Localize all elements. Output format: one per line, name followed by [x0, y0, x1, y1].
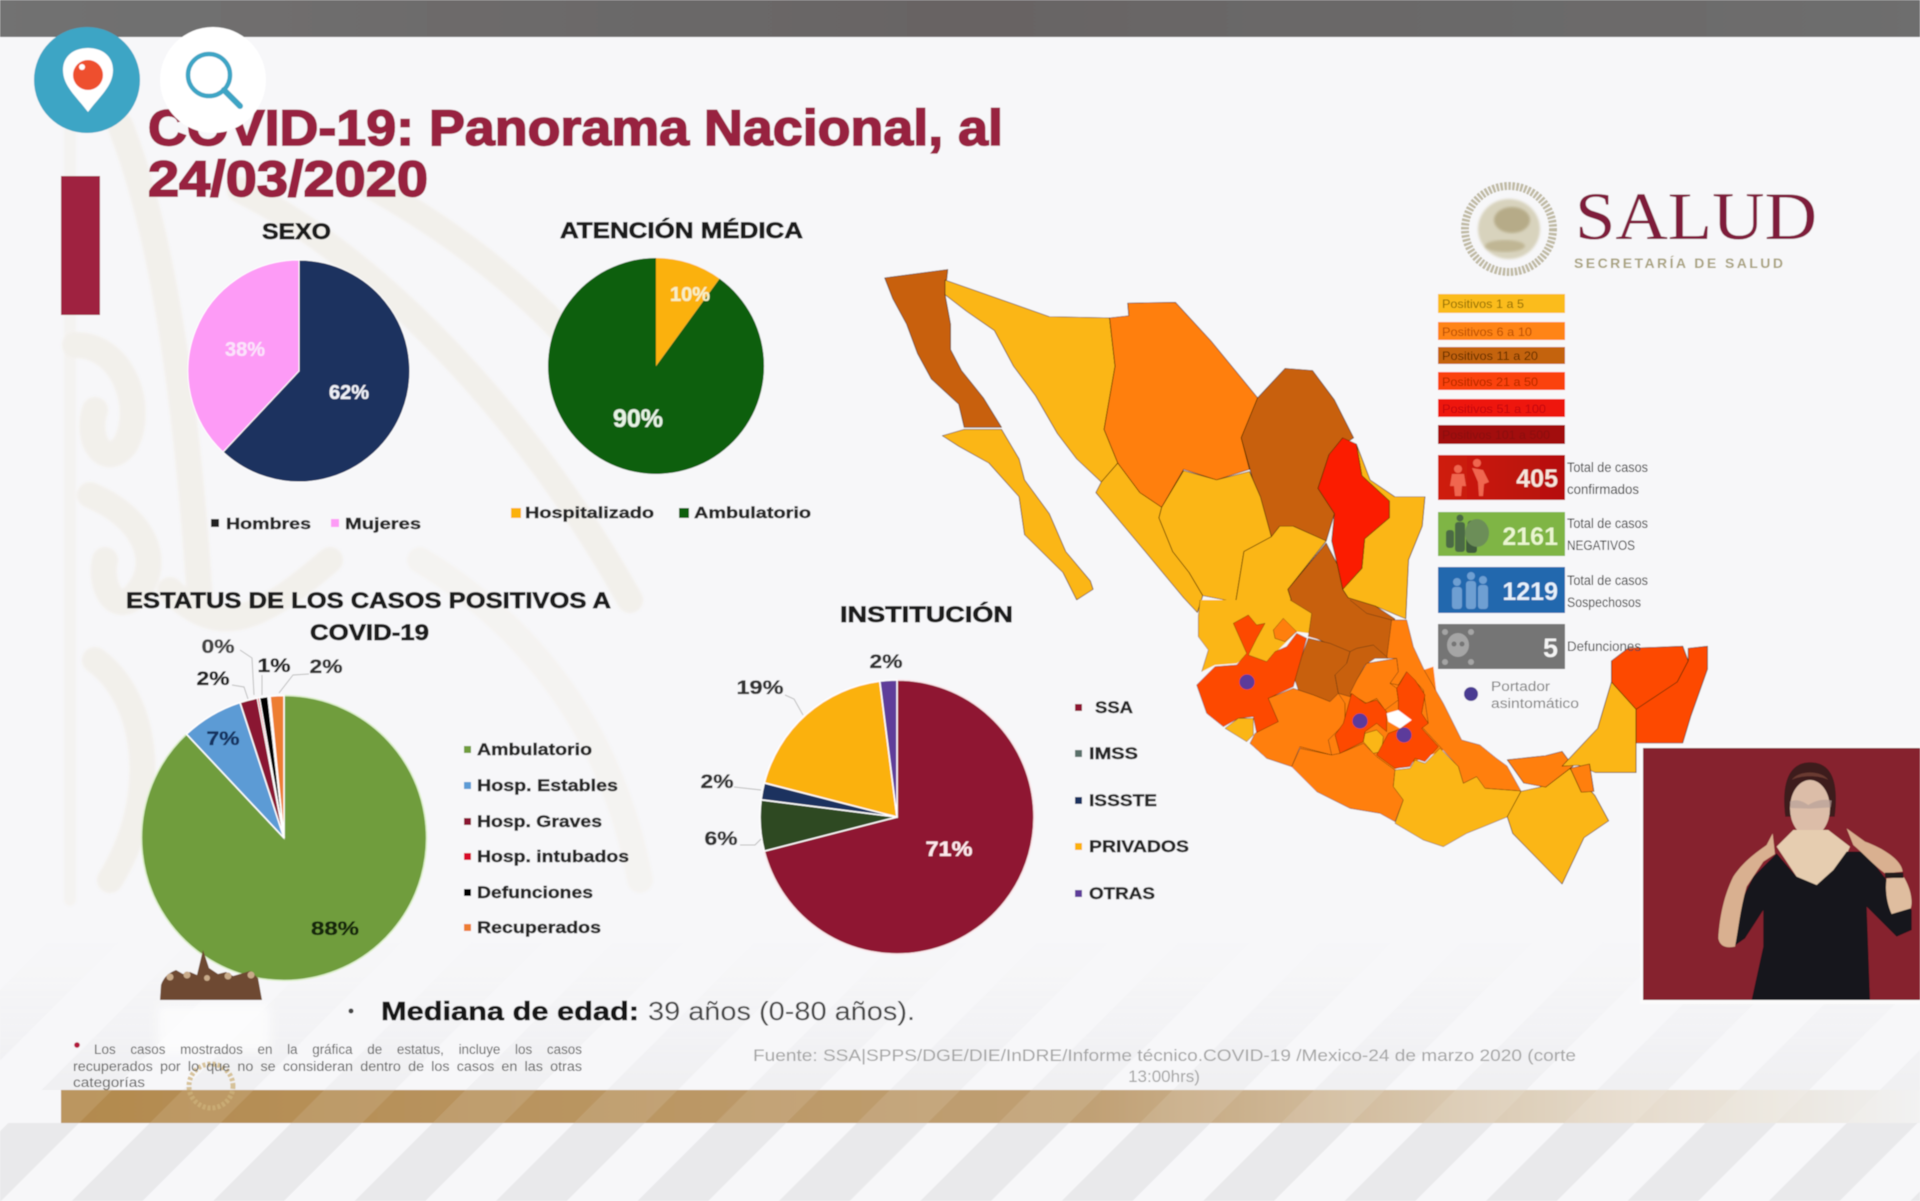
gold footer bar: [61, 1090, 1920, 1123]
map legend: positive ranges: Positivos 101 a 500: [1442, 428, 1550, 442]
chart: sexo: SEXO: [262, 219, 331, 244]
chart: institucion: 19%: [736, 678, 784, 699]
chart: estatus de los casos: Hosp. intubados: [477, 847, 629, 866]
chart: institucion: SSA: [1095, 698, 1133, 717]
chart: institucion: 71%: [926, 838, 973, 861]
chart: atencion medica: 10%: [670, 284, 710, 306]
logo: salud: SALUD: [1575, 178, 1817, 254]
chart: institucion: OTRAS: [1089, 884, 1155, 903]
emblem: figures of history: [158, 950, 270, 1052]
icon: search: [160, 27, 266, 133]
top grey browser band: [0, 0, 1920, 37]
median age: Mediana de edad:: [381, 996, 639, 1026]
median age: [348, 996, 915, 1026]
chart: sexo: 38%: [225, 339, 265, 361]
red accent bar: [61, 176, 100, 315]
stat: negative cases: [1438, 512, 1648, 556]
chart: sexo: Hombres: [226, 516, 311, 533]
sign language interpreter inset: [1640, 745, 1920, 1004]
chart: sexo: [188, 219, 421, 533]
stat: suspected cases: Total de casos: [1567, 573, 1648, 588]
legend: asymptomatic carrier: Portador: [1491, 679, 1551, 694]
stat: suspected cases: 1219: [1502, 578, 1558, 606]
chart: estatus de los casos: COVID-19: [310, 620, 429, 645]
chart: estatus de los casos: 1%: [258, 656, 291, 677]
chart: atencion medica: Hospitalizado: [525, 505, 654, 522]
chart: estatus de los casos: Hosp. Graves: [477, 812, 602, 831]
chart: atencion medica: 90%: [613, 405, 663, 433]
chart: atencion medica: ATENCIÓN MÉDICA: [560, 218, 803, 243]
chart: institucion: PRIVADOS: [1089, 837, 1189, 856]
stat: negative cases: 2161: [1502, 523, 1558, 551]
chart: estatus de los casos: Hosp. Estables: [477, 776, 618, 795]
chart: institucion: 2%: [870, 652, 903, 673]
chart: atencion medica: [511, 218, 811, 522]
map legend: positive ranges: Positivos 6 a 10: [1442, 325, 1532, 339]
chart: estatus de los casos: [126, 588, 629, 981]
stat: negative cases: Total de casos: [1567, 516, 1648, 531]
chart: estatus de los casos: Ambulatorio: [477, 740, 592, 759]
chart: institucion: IMSS: [1089, 744, 1138, 763]
map legend: positive ranges: Positivos 1 a 5: [1442, 297, 1524, 311]
stat: confirmed cases: Total de casos: [1567, 460, 1648, 475]
map of Mexico by state: [885, 269, 1707, 884]
chart: sexo: 62%: [329, 382, 369, 404]
source: 13:00hrs): [1128, 1067, 1200, 1086]
background ornament: [70, 120, 640, 900]
map markers: asymptomatic carriers: [1240, 674, 1412, 742]
title: COVID-19: Panorama Nacional, al: [148, 100, 1003, 156]
chart: sexo: Mujeres: [345, 516, 421, 533]
stat: confirmed cases: confirmados: [1567, 482, 1639, 497]
chart: estatus de los casos: 2%: [196, 669, 230, 690]
chart: estatus de los casos: ESTATUS DE LOS CASOS POSITIVOS A: [126, 588, 611, 613]
chart: atencion medica: Ambulatorio: [694, 505, 811, 522]
faint diagonal stripes above footer: [0, 940, 1920, 1090]
chart: estatus de los casos: 2%: [310, 657, 343, 678]
legend: asymptomatic carrier: [1464, 679, 1579, 711]
footnote: categorías: [73, 1075, 145, 1090]
chart: estatus de los casos: 88%: [311, 919, 359, 940]
median age: 39 años (0-80 años).: [648, 996, 915, 1026]
stat: confirmed cases: 405: [1516, 465, 1558, 493]
stat: suspected cases: Sospechosos: [1567, 595, 1641, 610]
stat: suspected cases: [1438, 567, 1648, 613]
title: [148, 100, 1003, 207]
chart: estatus de los casos: Defunciones: [477, 883, 593, 902]
logo: salud: SECRETARÍA DE SALUD: [1574, 255, 1783, 271]
stat: negative cases: NEGATIVOS: [1567, 538, 1635, 553]
source: Fuente: SSA|SPPS/DGE/DIE/InDRE/Informe técnico.COVID-19 /Mexico-24 de marzo 2020 (corte: [753, 1046, 1576, 1065]
chart: institucion: ISSSTE: [1089, 791, 1157, 810]
stat: confirmed cases: [1438, 455, 1648, 500]
chart: institucion: INSTITUCIÓN: [840, 602, 1013, 627]
chart: institucion: 2%: [700, 772, 734, 793]
emblem: seal on footer: [189, 1064, 233, 1108]
stat: deaths: [1438, 624, 1641, 669]
footnote: [73, 1042, 582, 1090]
source: [753, 1046, 1576, 1086]
icon: periscope: [34, 27, 140, 133]
footnote: recuperados por lo que no se consideran dentro de los casos en las otras: [73, 1059, 582, 1074]
chart: estatus de los casos: 7%: [206, 729, 240, 750]
chart: estatus de los casos: Recuperados: [477, 918, 601, 937]
chart: institucion: 6%: [704, 829, 738, 850]
legend: asymptomatic carrier: asintomático: [1491, 696, 1579, 711]
map legend: positive ranges: [1438, 294, 1565, 444]
map legend: positive ranges: Positivos 51 a 100: [1442, 402, 1546, 416]
chart: institucion: [700, 602, 1189, 954]
logo: seal: [1465, 186, 1553, 272]
footnote: Los casos mostrados en la gráfica de estatus, incluye los casos: [94, 1042, 582, 1057]
stat: deaths: 5: [1543, 633, 1558, 663]
stat: deaths: Defunciones: [1567, 639, 1641, 654]
map legend: positive ranges: Positivos 11 a 20: [1442, 349, 1538, 363]
bottom striped band: [0, 1123, 1920, 1201]
chart: estatus de los casos: 0%: [202, 637, 235, 658]
title: 24/03/2020: [148, 151, 428, 207]
map legend: positive ranges: Positivos 21 a 50: [1442, 375, 1538, 389]
